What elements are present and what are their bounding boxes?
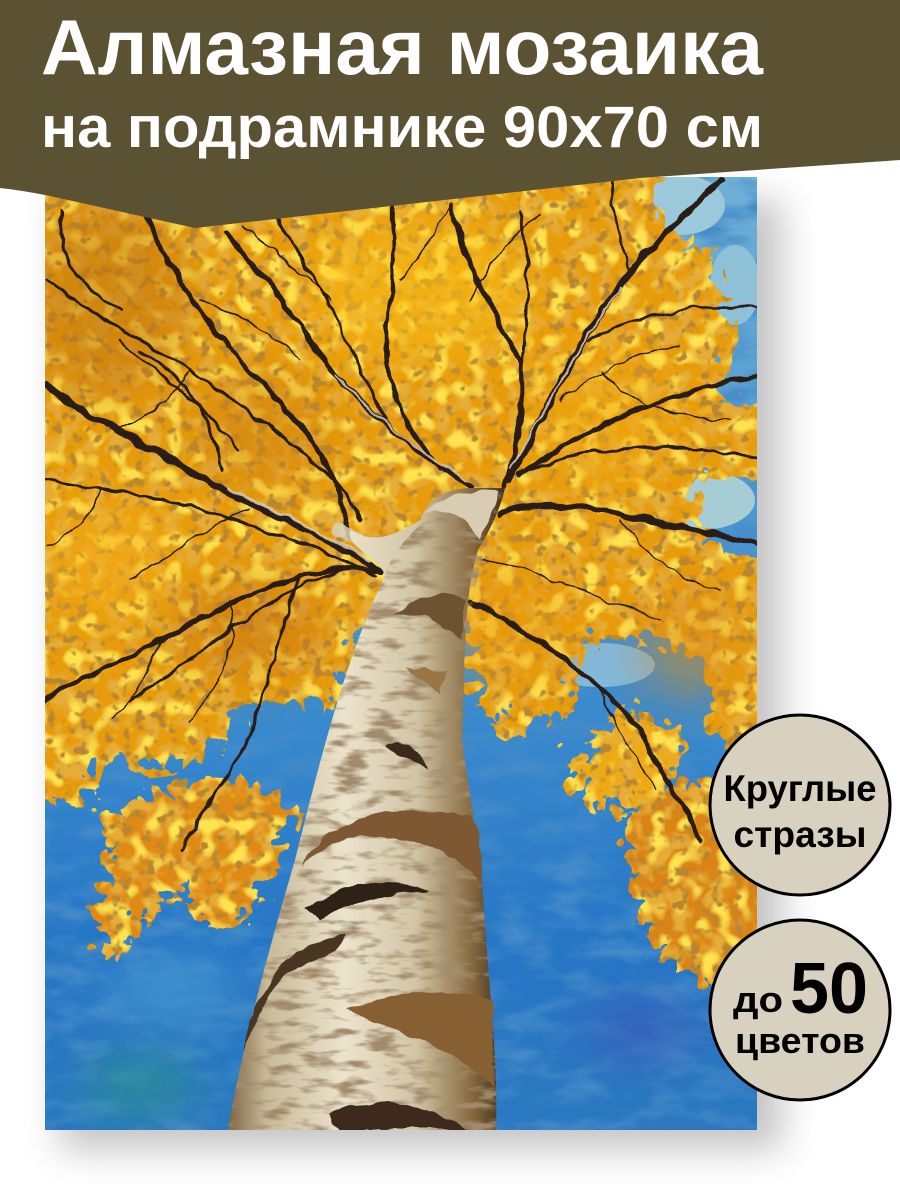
sky	[45, 175, 760, 1130]
foliage colour variation	[30, 200, 740, 700]
branch highlights	[230, 290, 620, 560]
foliage	[20, 150, 770, 975]
badge: up to 50 colours: 50	[790, 949, 868, 1029]
trunk	[228, 488, 505, 1130]
header banner	[0, 0, 900, 228]
badge: round rhinestones	[710, 715, 890, 895]
canvas shadow	[60, 200, 782, 1150]
branches	[45, 180, 757, 850]
badge: round rhinestones: стразы	[734, 814, 866, 855]
subtitle: на подрамнике 90х70 см	[41, 95, 763, 160]
badge: up to 50 colours	[710, 920, 890, 1100]
badge: up to 50 colours: цветов	[735, 1020, 865, 1061]
badge: up to 50 colours: до	[733, 979, 783, 1020]
painting: birch tree from below	[20, 150, 770, 1130]
bark patches	[245, 489, 500, 1130]
badge: round rhinestones: Круглые	[724, 768, 876, 809]
title: Алмазная мозаика	[41, 3, 764, 91]
